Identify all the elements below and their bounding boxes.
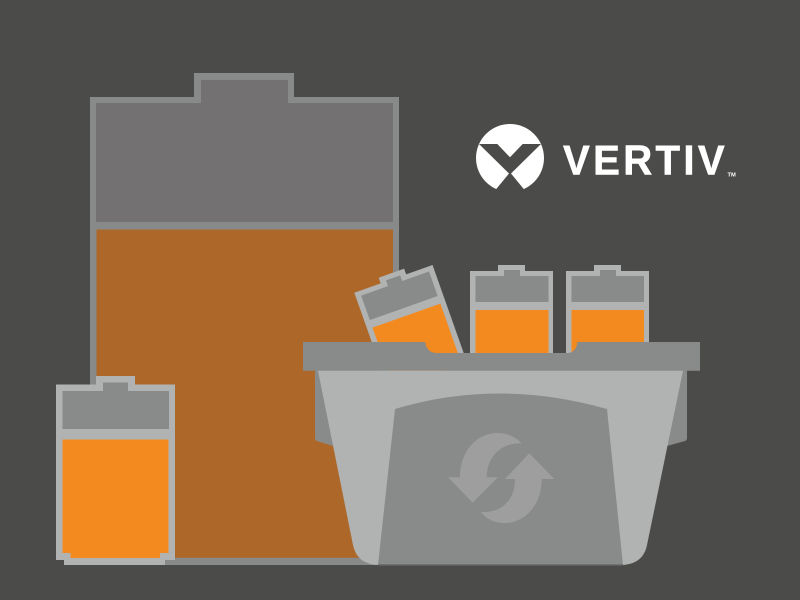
charge level: [572, 310, 644, 360]
battery casing: [56, 376, 175, 565]
logo mark: [476, 124, 544, 193]
upright battery in bin, right: [566, 265, 649, 360]
empty charge area: [62, 382, 169, 429]
down arrow: [448, 433, 522, 503]
battery casing: [90, 73, 399, 565]
charge level: [62, 440, 168, 558]
bin label panel: [378, 394, 623, 565]
empty charge area: [359, 266, 438, 320]
upright battery in bin, middle: [470, 265, 553, 360]
battery casing: [470, 265, 553, 360]
bin lid rim: [303, 342, 700, 371]
empty charge area: [572, 270, 644, 302]
tilted battery in bin: [352, 259, 467, 391]
battery casing: [352, 259, 467, 391]
wordmark: VERTIV: [563, 136, 728, 184]
battery casing: [566, 265, 649, 360]
large background battery: [90, 73, 399, 565]
up arrow: [481, 453, 554, 523]
empty charge area: [476, 270, 548, 302]
bin body: [318, 371, 683, 565]
charge level: [96, 230, 393, 558]
charge level: [476, 310, 548, 360]
recycling bin front: [303, 342, 700, 566]
icon: recycling arrows: [448, 433, 554, 523]
charge level: [373, 304, 462, 389]
Vertiv logo: [476, 124, 736, 193]
back wall of recycling bin: [315, 368, 687, 446]
empty charge area: [96, 80, 393, 222]
trademark: TM: [728, 172, 736, 178]
small battery left foreground: [56, 376, 175, 565]
bin bottom edge: [378, 564, 623, 566]
